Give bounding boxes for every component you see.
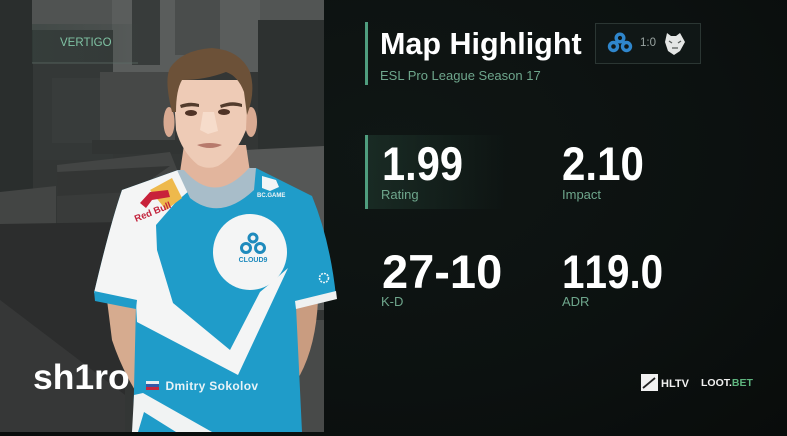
- stat: adr: [562, 245, 663, 309]
- neck: [180, 145, 250, 191]
- player full name: Dmitry Sokolov: [166, 379, 258, 393]
- label: K-D: [381, 294, 403, 309]
- bc.game wordmark: BC.GAME: [257, 193, 285, 199]
- icon: hltv square: [641, 374, 658, 391]
- sleeve sponsor: [320, 274, 328, 282]
- accent bar: [365, 135, 368, 209]
- value: 119.0: [562, 245, 663, 298]
- logo: loot.bet: LOOT.BET: [701, 377, 753, 389]
- icon: g2 logo: [665, 33, 685, 55]
- arms: [107, 300, 318, 395]
- white right cuff: [295, 291, 337, 309]
- panel: player photo: [0, 0, 337, 432]
- stat: impact: [562, 137, 644, 202]
- label: Rating: [381, 187, 419, 202]
- logo: hltv: [641, 374, 689, 391]
- icon: cloud9 logo: [608, 32, 632, 52]
- white chevron: [137, 268, 288, 375]
- white chest circle: [213, 214, 287, 290]
- value: 2.10: [562, 137, 644, 190]
- red bull logo: [140, 190, 170, 208]
- value: 1.99: [382, 137, 463, 190]
- accent bar: [365, 22, 368, 85]
- orange shoulder patch: [150, 178, 182, 210]
- lower white stripe: [132, 393, 212, 432]
- label: ADR: [562, 294, 589, 309]
- cloud9 wordmark: CLOUD9: [239, 257, 267, 264]
- blue left cuff: [94, 291, 137, 309]
- jersey base: [94, 168, 336, 432]
- icon: russian flag: [146, 381, 159, 390]
- hltv wordmark: HLTV: [661, 378, 689, 390]
- player name with flag: [146, 379, 258, 393]
- label: Impact: [562, 187, 601, 202]
- map score: 1:0: [640, 37, 656, 49]
- stat: rating: [365, 135, 505, 209]
- collar: [177, 168, 256, 208]
- cloud9 chest logo: [242, 234, 264, 252]
- value: 27-10: [382, 245, 502, 298]
- sponsor bc.game: [262, 176, 279, 191]
- title: Map Highlight: [380, 27, 582, 61]
- map tag background: [32, 24, 138, 63]
- subtitle: ESL Pro League Season 17: [380, 68, 541, 83]
- white left shoulder and sleeve: [94, 170, 190, 322]
- map name: VERTIGO: VERTIGO: [60, 37, 112, 49]
- stat: k-d: [381, 245, 502, 309]
- map background scene: [0, 0, 324, 432]
- match score box: [595, 23, 701, 64]
- title block: [365, 22, 582, 85]
- player nickname: sh1ro: [33, 357, 130, 397]
- red bull wordmark: Red Bull: [133, 200, 173, 225]
- player figure: [94, 48, 337, 432]
- jersey: [94, 145, 337, 432]
- head: [164, 48, 257, 168]
